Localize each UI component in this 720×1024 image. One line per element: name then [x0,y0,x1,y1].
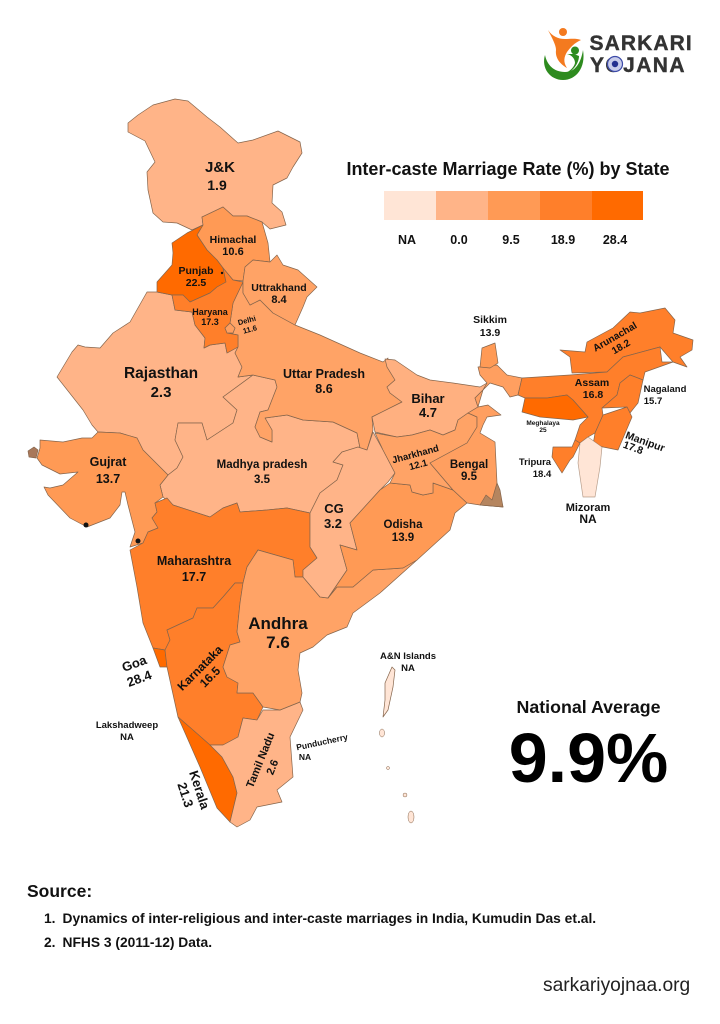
label: Nagaland [644,384,687,407]
label: Karnataka: 16.5 [197,664,223,690]
national average heading: National Average [517,697,661,717]
label: Bengal: 9.5 [461,471,478,483]
label: Sikkim: 13.9 [480,327,500,339]
legend labels: 18.9 [551,233,575,247]
state: Punjab [157,225,226,302]
label: Maharashtra: Maharashtra [157,554,232,568]
state: Odisha [328,483,467,598]
source list: 2. [44,935,56,950]
label: Himachal: Himachal [210,234,256,246]
label: Uttar Pradesh [283,367,365,396]
label: Maharashtra [157,554,232,584]
label: Kerala [174,769,213,812]
label: J&K: J&K [205,159,235,176]
label: Assam: 16.8 [583,389,603,401]
label: Arunachal: Arunachal [591,320,639,354]
icon: wheel [607,56,623,72]
label: CG [324,501,344,531]
state: Mizoram [578,437,602,497]
logo [544,28,693,80]
label: Tamil Nadu: Tamil Nadu [244,731,277,790]
state: Jammu and Kashmir [128,99,302,230]
state: Jharkhand [375,413,477,495]
label: Madhya pradesh: Madhya pradesh [217,459,307,471]
label: Uttrakhand: 8.4 [271,294,288,306]
legend labels: NA [398,233,416,247]
label: Madhya pradesh: 3.5 [254,474,271,486]
label: Jharkhand: Jharkhand [391,443,440,466]
state: Kerala [178,717,237,822]
state labels [90,159,687,812]
label: Kerala: 21.3 [174,780,197,809]
state: Rajasthan [57,292,253,475]
label: Maharashtra: 17.7 [182,570,206,584]
label: Goa: 28.4 [125,667,154,690]
label: Tamil Nadu: 2.6 [264,758,281,777]
label: Punducherry [295,732,349,762]
source list: NFHS 3 (2011-12) Data. [62,935,212,950]
state: Karnataka [165,583,263,745]
state: Haryana [172,268,243,353]
label: Haryana [192,307,229,327]
label: Nagaland: 15.7 [644,396,662,407]
logo text: yojana: YOJANA [590,54,686,77]
label: A&N Islands: A&N Islands [380,651,436,662]
label: Tripura [519,457,552,480]
state: Assam [518,347,673,443]
label: Lakshadweep: NA [120,732,134,743]
label: Odisha [384,519,423,544]
state: Meghalaya [522,395,588,420]
legend labels: 0.0 [450,233,468,247]
label: Odisha: 13.9 [392,532,414,544]
label: Punjab: 22.5 [186,277,206,289]
label: Himachal: 10.6 [222,246,244,258]
label: Punducherry: Punducherry [295,732,349,752]
label: Mizoram [566,502,611,526]
label: Jharkhand: 12.1 [408,457,429,473]
label: A&N Islands: NA [401,663,415,674]
label: Arunachal: 18.2 [610,338,633,357]
label: Kerala: Kerala [186,769,213,812]
label: Rajasthan [124,365,198,401]
label: Punjab [178,265,214,289]
state: Bihar [372,359,487,437]
label: Haryana: Haryana [192,307,229,317]
state: Maharashtra [130,498,317,650]
state: Sikkim [480,343,498,368]
label: Lakshadweep: Lakshadweep [96,720,158,731]
label: Goa: Goa [120,652,149,675]
label: Bihar: Bihar [411,391,445,406]
legend colour scale [384,191,643,220]
label: Bengal: Bengal [450,459,488,471]
label: Tripura: Tripura [519,457,552,468]
legend labels: 9.5 [502,233,520,247]
label: Bengal [450,459,488,483]
label: J&K [205,159,235,193]
label: Lakshadweep [96,720,158,743]
label: Himachal [210,234,256,258]
label: Bihar [411,391,445,420]
label: Andhra [248,614,308,652]
state: Andhra Pradesh [223,550,417,710]
label: Goa [120,652,154,690]
label: Uttar Pradesh: 8.6 [315,382,333,396]
logo text: sarkari: SARKARI [590,32,693,55]
label: Punducherry: NA [299,752,311,762]
label: Gujrat: 13.7 [96,472,120,486]
label: Manipur: 17.8 [621,439,645,457]
source heading: Source: [27,881,92,901]
label: Rajasthan: Rajasthan [124,365,198,382]
label: Assam [575,377,609,401]
marks: Sundarbans, Kutch creek, Daman, Diu, Chandigarh [28,272,503,544]
label: Mizoram: Mizoram [566,502,611,514]
label: Assam: Assam [575,377,609,389]
state: Chhattisgarh [303,432,395,598]
state: Nagaland [602,375,643,413]
label: Gujrat [90,455,127,486]
legend title: Inter-caste Marriage Rate (%) by State [346,159,670,179]
label: Andhra: 7.6 [266,633,290,652]
label: Gujrat: Gujrat [90,455,127,469]
label: Rajasthan: 2.3 [151,384,171,401]
label: Haryana: 17.3 [201,317,219,327]
label: Meghalaya [526,420,560,434]
label: CG: 3.2 [324,516,342,531]
Andaman and Nicobar islands [380,667,414,823]
label: Uttar Pradesh: Uttar Pradesh [283,367,365,381]
state: Tripura [552,440,580,473]
label: Uttrakhand [251,282,307,306]
label: Tripura: 18.4 [533,469,552,480]
label: Karnataka: Karnataka [175,642,226,693]
state: Gujarat [37,432,168,547]
state: Tamil Nadu [210,702,303,827]
national average value: 9.9% [509,719,668,797]
legend labels: 28.4 [603,233,627,247]
map of India [28,99,693,827]
label: Delhi: 11.6 [242,323,258,336]
label: Bihar: 4.7 [419,405,437,420]
label: A&N Islands [380,651,436,674]
legend labels [398,233,627,247]
label: Andhra: Andhra [248,614,308,633]
source list: 1. [44,911,56,926]
label: Sikkim: Sikkim [473,314,507,326]
label: CG: CG [324,501,344,516]
state: Himachal Pradesh [197,207,270,281]
label: Sikkim [473,314,507,339]
label: Madhya pradesh [217,459,307,486]
state: Manipur [593,407,632,450]
source list: Dynamics of inter-religious and inter-caste marriages in India, Kumudin Das et.al. [62,911,596,926]
label: Punjab: Punjab [178,265,214,277]
label: Odisha: Odisha [384,519,423,531]
label: Delhi: Delhi [237,314,257,327]
state: Goa [153,648,167,667]
label: Delhi [237,314,258,336]
label: Meghalaya: Meghalaya [526,420,560,427]
label: Meghalaya: 25 [539,427,547,434]
source list [44,911,596,950]
state: Arunachal Pradesh [560,308,693,373]
website footer: sarkariyojnaa.org [543,975,690,996]
state: West Bengal [430,365,522,507]
icon: logo figure [544,28,584,80]
label: Manipur: Manipur [624,429,666,455]
state: Uttarakhand [243,255,317,325]
label: Uttrakhand: Uttrakhand [251,282,307,294]
state: Delhi [225,323,235,333]
label: J&K: 1.9 [207,177,227,193]
label: Nagaland: Nagaland [644,384,687,395]
state: Uttar Pradesh [227,282,402,450]
label: Mizoram: NA [579,512,597,526]
label: Jharkhand [391,443,443,477]
state: Madhya Pradesh [160,375,360,517]
